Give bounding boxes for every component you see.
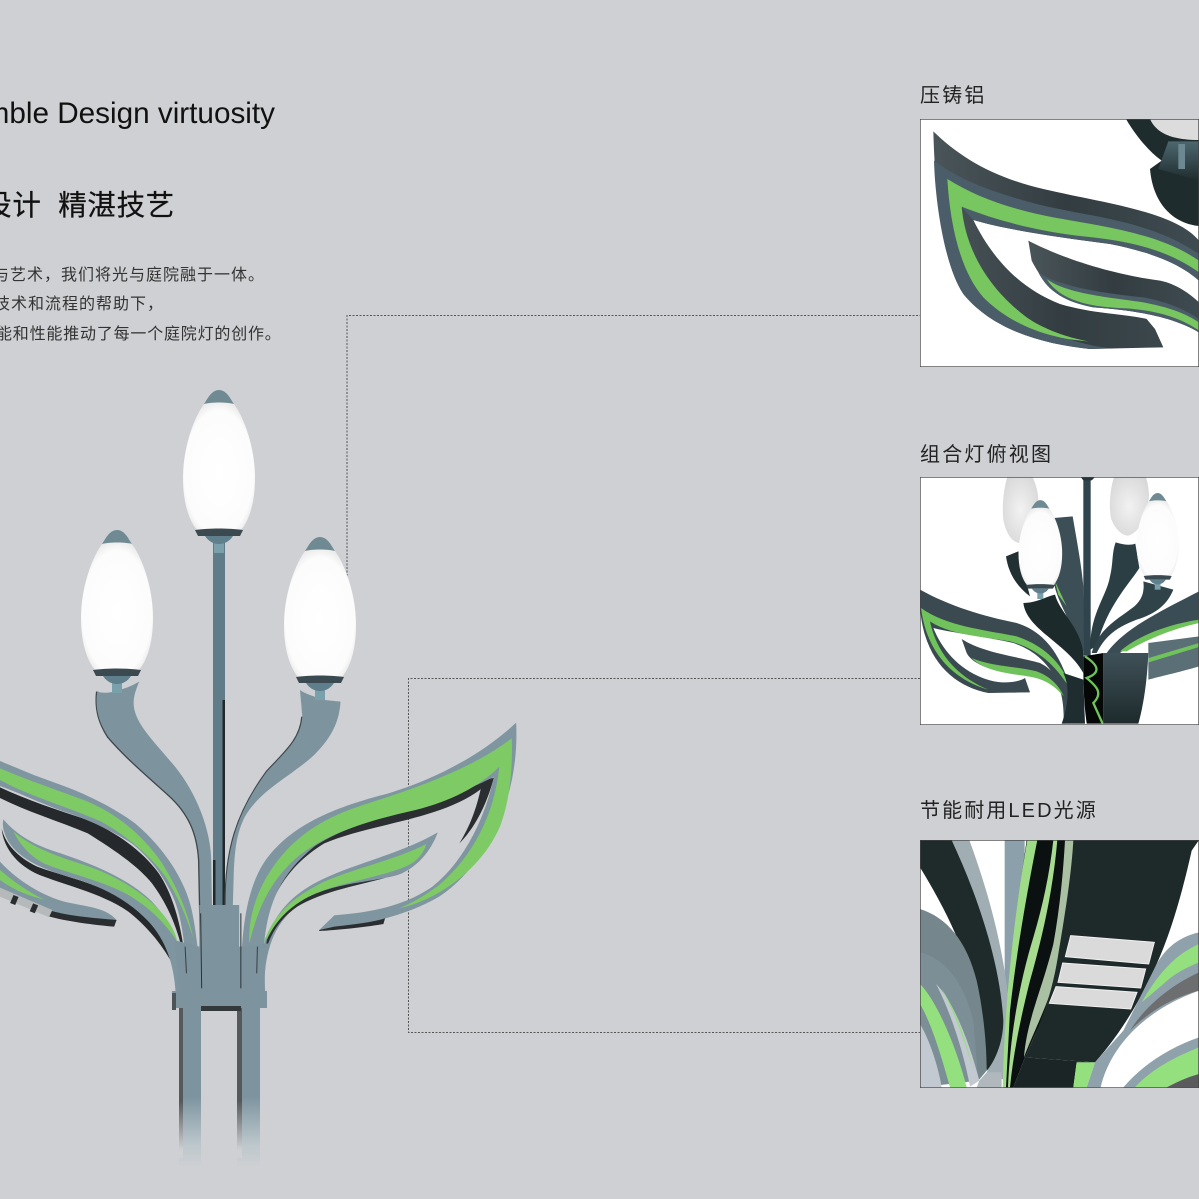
left arms bbox=[920, 840, 1009, 1087]
leaf large bbox=[933, 131, 1199, 349]
panel label: die-cast aluminium: 压铸铝 bbox=[920, 84, 987, 107]
panel label: top view: 组合灯俯视图 bbox=[920, 443, 1053, 466]
right lamp arm bbox=[220, 690, 341, 993]
left small leaf bbox=[2, 819, 186, 993]
left large leaf bbox=[0, 761, 202, 993]
lamp leaves and arms drawn in zoom coordinates bbox=[0, 682, 516, 993]
bulb: left bbox=[81, 530, 153, 693]
hub bbox=[1062, 653, 1148, 724]
illustration: garden lamp bbox=[0, 390, 516, 1168]
LED modules bbox=[1049, 936, 1154, 1009]
back bulbs bbox=[1003, 477, 1149, 543]
luminaire body bbox=[1013, 840, 1199, 1087]
centre strips bbox=[1003, 840, 1073, 1087]
right leaves bbox=[1107, 591, 1199, 680]
centre stem bbox=[213, 540, 225, 906]
left tail leaf bbox=[0, 862, 117, 927]
front bulbs bbox=[1018, 500, 1062, 599]
right leaves bbox=[1073, 932, 1199, 1087]
left leaves bbox=[920, 590, 1077, 724]
lamp socket detail bbox=[1126, 119, 1199, 226]
pole bbox=[1005, 840, 1025, 993]
panel: LED light source detail bbox=[920, 840, 1199, 1088]
dotted leader: top view and LED callouts bbox=[408, 678, 920, 1032]
text block: description: 能和性能推动了每一个庭院灯的创作。 bbox=[0, 325, 282, 343]
leaf small bbox=[1028, 241, 1199, 332]
clamp bbox=[172, 991, 267, 1011]
text block: description bbox=[0, 266, 282, 343]
panel label: LED light source: 节能耐用LED光源 bbox=[920, 799, 1098, 822]
panel: die-cast aluminium detail bbox=[920, 119, 1199, 367]
centre mount bbox=[174, 905, 270, 993]
front arms bbox=[1023, 581, 1173, 673]
left lamp arm bbox=[97, 682, 213, 993]
bulb: centre bbox=[183, 390, 255, 553]
centre pole and back arms bbox=[1006, 477, 1139, 656]
dotted leader: die-cast aluminium callout bbox=[347, 316, 920, 576]
bulb: right bbox=[284, 537, 356, 700]
panel: combination lamp top view bbox=[920, 477, 1199, 725]
text block: description: 与艺术，我们将光与庭院融于一体。 bbox=[0, 266, 265, 284]
right large leaf bbox=[240, 723, 516, 993]
right small leaf bbox=[257, 832, 438, 993]
lamp poles bbox=[179, 1008, 260, 1168]
